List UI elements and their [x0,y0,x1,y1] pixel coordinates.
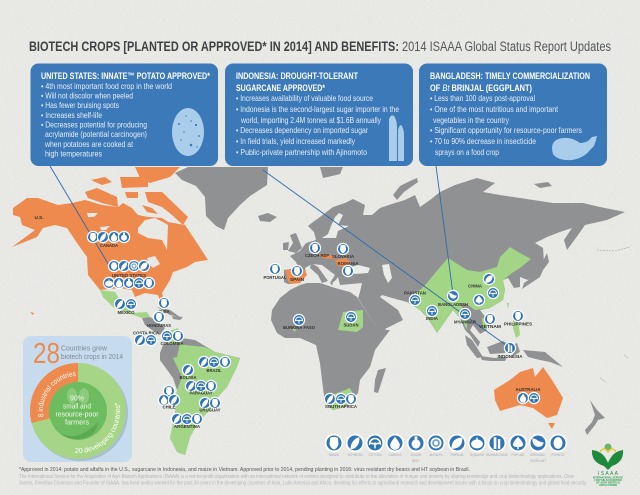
country: indonesia [498,342,523,359]
isaaa logo: APPLICATIONS [599,483,617,487]
panel: indonesia sugarcane: • In field trials, yield increased markedly [236,136,356,146]
country: mexico: MEXICO [118,310,135,315]
panel: united states potato: • 4th most important food crop in the world [41,81,172,91]
panel: united states potato: UNITED STATES: INNATE™ POTATO APPROVED* [41,71,210,81]
panel: indonesia sugarcane: • Increases availability of valuable food source [236,93,373,103]
crop legend: SQUASH [470,453,484,457]
panel: indonesia sugarcane: • Indonesia is the second-largest sugar importer in the [236,104,399,114]
crop legend: BRINJAL/ [530,453,546,457]
panel: indonesia sugarcane: world, importing 2.4M tonnes at $1.6B annually [240,115,382,125]
panel: bangladesh brinjal: vegetables in the country [433,115,510,125]
panel: indonesia sugarcane: INDONESIA: DROUGHT-TOLERANT [236,71,358,81]
country: myanmar: MYANMAR [454,320,477,324]
country: honduras [147,311,171,328]
country: burkina faso [283,314,315,330]
icon: potato [172,108,204,156]
country: cuba: CUBA [158,309,170,314]
isaaa logo: ISAAA [598,471,619,477]
country: india [426,305,439,321]
country: romania: ROMANIA [338,261,359,266]
panel: united states potato: • Decreases potential for producing [41,120,147,130]
country: india: INDIA [426,316,439,321]
panel: indonesia sugarcane: SUGARCANE APPROVED* [236,83,325,93]
big number 28: 28 [33,338,60,370]
country: slovakia: SLOVAKIA [332,254,355,259]
donut chart: farmers [65,420,89,426]
caption: Countries grew [61,344,108,352]
country: czech republic [305,242,329,258]
country: romania [338,261,359,277]
country: myanmar [454,308,477,324]
crop legend: SUGARCANE [486,453,508,457]
country: sudan: SUDAN [344,322,359,328]
footnotes: *Approved in 2014: potato and alfalfa in the U.S., sugarcane in Indonesia, and maize in Vietnam. Approved prior to 2014, pending planting in 2016: virus resistant dry beans and HT soybean in Brazil. [19,467,470,473]
country: chile [158,385,180,410]
panel: united states potato: acrylamide (potential carcinogen) [45,129,147,139]
country: sudan [344,311,359,328]
crop legend: SUGAR [410,453,422,457]
country: canada [87,231,130,248]
country: united states: UNITED STATES [112,273,146,278]
panel: indonesia sugarcane: • Public-private partnership with Ajinomoto [236,147,367,157]
country: burkina faso: BURKINA FASO [283,325,315,330]
panel: united states potato: • Increases shelf-life [41,110,102,120]
crop legend: CANOLA [388,453,402,457]
panel: bangladesh brinjal [419,64,607,166]
africa [271,283,390,410]
country: paraguay [185,380,217,396]
country: colombia: COLOMBIA [160,341,184,346]
panel: bangladesh brinjal: sprays on a food crop [435,147,499,157]
country: china [468,273,499,306]
country: vietnam: VIETNAM [479,324,501,329]
country: mexico [114,298,137,315]
adopting countries: north america [12,198,208,307]
panel: bangladesh brinjal: BANGLADESH: TIMELY COMMERCIALIZATION [430,71,590,81]
footnotes [19,467,587,486]
country: honduras: HONDURAS [147,323,171,328]
kuril and pacific islands [597,247,630,382]
country: united states [103,260,155,289]
panel: indonesia sugarcane [225,64,413,166]
panel: united states potato: high temperatures [45,148,102,158]
crop legend: COTTON [368,453,382,457]
adopting countries: green latin america [100,290,240,455]
country: portugal: PORTUGAL [264,275,287,280]
icon: eggplant [552,136,597,160]
country: portugal [264,263,287,280]
country: spain [290,265,305,282]
adopting countries: green asia and africa [292,247,531,410]
donut chart [30,363,128,461]
country: czech republic: CZECH REP [305,253,329,258]
donut chart: 20 developing countries* [75,402,120,454]
panel: bangladesh brinjal: • 70 to 90% decrease in insecticide [430,136,536,146]
panel: united states potato: • Will not discolor when peeled [41,90,133,100]
country: uruguay: URUGUAY [200,408,220,412]
country: philippines: PHILIPPINES [504,322,532,326]
eurasia [284,178,625,347]
country: bolivia: BOLIVIA [180,375,197,380]
country: indonesia: INDONESIA [498,354,523,359]
world map [12,167,630,455]
country: brazil: BRAZIL [206,368,222,373]
country: vietnam [479,313,501,329]
country: spain: SPAIN [290,277,305,282]
donut chart: resource-poor [56,412,99,418]
panel: united states potato [30,64,218,166]
panel: united states potato: • Has fewer bruising spots [41,100,119,110]
panel: 28 countries [23,336,132,462]
panel: bangladesh brinjal: • Significant opportunity for resource-poor farmers [430,125,582,135]
panel: bangladesh brinjal: OF Bt BRINJAL (EGGPLANT) [430,83,532,93]
donut chart: 90% [70,396,84,402]
islands of europe, arctic and asia [283,167,605,435]
country: china: CHINA [468,284,483,288]
country: uruguay [199,397,221,412]
footnotes: The International Service for the Acquisition of Agri-Biotech Applications (ISAAA) is a not-for-profit organization with an international network of centers designed to contribute to the alleviation of hunger and poverty by sharing knowledge and crop biotechnology applications. Clive [19,474,574,480]
south america [160,337,240,455]
crop legend: POTATO [552,453,565,457]
isaaa logo: OF AGRI-BIOTECH [596,480,620,484]
country: paraguay: PARAGUAY [190,390,212,396]
crop legend: MAIZE [329,453,339,457]
title: BIOTECH CROPS [PLANTED OR APPROVED* IN 2014] AND BENEFITS: [29,39,399,54]
country: costa rica [133,330,160,346]
country: bangladesh [438,290,469,307]
canadian arctic islands [85,167,188,225]
isaaa logo [592,444,623,487]
country: chile: CHILE [162,404,176,410]
panel: bangladesh brinjal: • One of the most nutritious and important [430,104,558,114]
caption [61,344,123,361]
panel: bangladesh brinjal: • Less than 100 days post-approval [430,93,535,103]
country: bangladesh: BANGLADESH [438,302,469,307]
country: argentina: ARGENTINA [174,424,201,429]
spain, central europe and australia [30,254,563,429]
country: colombia [160,330,184,346]
country: australia: AUSTRALIA [516,387,541,392]
donut chart: small and [63,404,91,410]
crop legend: EGGPLANT [530,459,547,463]
crop legend: SOYBEAN [348,453,363,457]
crop legend: BEET [412,459,421,463]
country: australia [516,387,541,404]
label: alaska: U.S. [34,215,44,220]
country: south africa: SOUTH AFRICA [325,404,358,409]
central america and caribbean [142,307,183,335]
country: philippines [504,310,532,326]
isaaa logo: INTERNATIONAL SERVICE [593,476,623,480]
country: south africa [324,393,358,409]
greenland and iceland [175,167,277,230]
panel: united states potato: when potatoes are cooked at [44,139,133,149]
caption: biotech crops in 2014 [61,352,123,361]
country: slovakia [332,243,355,259]
inland seas [312,213,392,285]
country: costa rica: COSTA RICA [133,330,160,336]
leader lines [50,166,510,348]
crop legend: ALFALFA [430,453,443,457]
panel: indonesia sugarcane: • Decreases dependency on imported sugar [236,125,368,135]
country: bolivia [180,364,197,380]
icon: sugarcane [389,115,404,161]
donut chart: 8 industrial countries [38,372,76,418]
country: pakistan: PAKISTAN [404,290,427,296]
country: brazil [198,356,231,373]
country: argentina [171,413,203,429]
crop legend: PAPAYA [450,453,464,457]
country: pakistan [404,290,427,306]
country: canada: CANADA [100,243,119,248]
isaaa logo: FOR THE ACQUISITION [594,478,622,482]
crop legend: POPLAR [512,453,525,457]
crop legend [325,434,567,463]
country: cuba [158,297,170,314]
